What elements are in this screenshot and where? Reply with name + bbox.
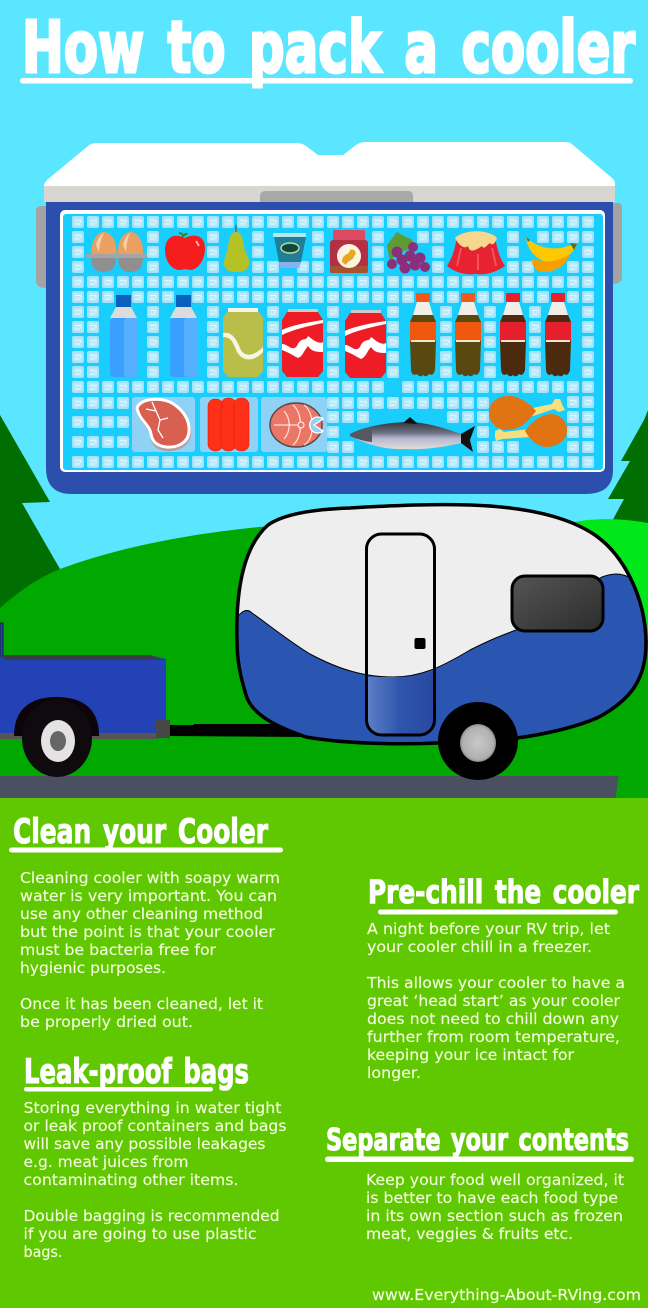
text: leak-proof bags	[24, 1099, 286, 1261]
camper trailer tow bar	[170, 724, 310, 737]
section: leak-proof bags	[24, 1052, 286, 1261]
text: clean your cooler: Cleaning cooler with soapy warm	[20, 869, 280, 887]
icon: orange cola bottle 2	[455, 293, 481, 376]
cooler	[36, 142, 622, 494]
text: leak-proof bags: Storing everything in water tight	[24, 1099, 282, 1117]
icon: red cola bottle 1	[500, 293, 526, 376]
icon: red cola bottle 2	[545, 293, 571, 376]
icon: salmon steak	[270, 403, 323, 447]
trailer outline	[237, 505, 646, 744]
icon: green soda can	[223, 308, 263, 377]
text: clean your cooler: but the point is that your cooler	[20, 923, 276, 941]
text: clean your cooler	[20, 869, 280, 1031]
text: separate your contents: meat, veggies & fruits etc.	[366, 1225, 573, 1243]
cooler body	[46, 200, 613, 494]
text: leak-proof bags: contaminating other items.	[24, 1171, 238, 1189]
icon: eggs in carton	[86, 232, 147, 272]
text: leak-proof bags: bags.	[24, 1243, 62, 1261]
text: separate your contents	[366, 1171, 624, 1243]
text: pre-chill the cooler	[366, 920, 625, 1082]
text: pre-chill the cooler: further from room temperature,	[367, 1028, 620, 1046]
text: leak-proof bags: Double bagging is recommended	[24, 1207, 280, 1225]
text: pre-chill the cooler: keeping your ice intact for	[367, 1046, 575, 1064]
icon: yogurt cup	[273, 233, 306, 268]
dark green hill	[0, 525, 648, 798]
text: leak-proof bags: if you are going to use plastic	[24, 1225, 256, 1243]
cooler lid	[44, 142, 615, 202]
camper trailer	[220, 505, 648, 780]
left pine tree	[0, 415, 60, 620]
cooler interior with ice	[60, 210, 605, 472]
text: pre-chill the cooler: A night before your RV trip, let	[367, 920, 610, 938]
text: leak-proof bags: e.g. meat juices from	[24, 1153, 188, 1171]
text: clean your cooler: use any other cleaning method	[20, 905, 263, 923]
text: clean your cooler: water is very important. You can	[20, 887, 277, 905]
road	[0, 776, 618, 798]
icon: pear	[224, 225, 249, 272]
section: clean your cooler	[9, 812, 283, 1031]
truck wheel	[14, 697, 99, 777]
text: separate your contents: is better to have each food type	[366, 1189, 618, 1207]
text: pre-chill the cooler: longer.	[367, 1064, 421, 1082]
right pine tree	[608, 410, 648, 525]
website credit: www.Everything-About-RVing.com	[372, 1286, 641, 1304]
icon: bananas	[526, 237, 577, 272]
icon: red soda can 1	[282, 309, 323, 377]
cooler side handles	[36, 203, 622, 288]
heading: leak-proof bags: Leak-proof bags	[24, 1052, 249, 1092]
icon: red soda can 2	[345, 310, 386, 378]
text: separate your contents: in its own section such as frozen	[366, 1207, 623, 1225]
text: clean your cooler: must be bacteria free for	[20, 941, 217, 959]
trailer door	[366, 534, 434, 735]
section: separate your contents	[325, 1123, 634, 1243]
trailer wheel	[438, 702, 518, 780]
icon: sausages	[208, 398, 249, 451]
icon: grapes	[387, 232, 430, 274]
heading: clean your cooler: Clean your Cooler	[13, 812, 268, 852]
icon: water bottle 1	[110, 295, 138, 377]
icon: jam jar	[330, 230, 368, 273]
icon: orange cola bottle 1	[410, 293, 436, 376]
food panels	[132, 397, 327, 452]
text: clean your cooler: be properly dried out.	[20, 1013, 193, 1031]
icon: steak	[136, 399, 191, 451]
pickup truck	[0, 623, 170, 777]
text: leak-proof bags: will save any possible leakages	[24, 1135, 266, 1153]
icon: water bottle 2	[170, 295, 198, 377]
bright green hill	[560, 519, 648, 640]
text: pre-chill the cooler: your cooler chill in a freezer.	[367, 938, 592, 956]
sky background	[0, 0, 648, 800]
section: pre-chill the cooler	[366, 873, 639, 1082]
text: clean your cooler: Once it has been cleaned, let it	[20, 995, 263, 1013]
text: separate your contents: Keep your food well organized, it	[366, 1171, 624, 1189]
icon: chicken drumsticks	[489, 396, 567, 447]
panel: green text section	[0, 798, 648, 1308]
trailer shell	[237, 505, 646, 744]
text: pre-chill the cooler: This allows your cooler to have a	[366, 974, 625, 992]
text: leak-proof bags: or leak proof containers and bags	[24, 1117, 286, 1135]
trailer window	[512, 576, 603, 631]
icon: jelly dessert	[447, 231, 505, 274]
icon: apple	[165, 233, 205, 270]
text: pre-chill the cooler: does not need to chill down any	[367, 1010, 619, 1028]
text: pre-chill the cooler: great ‘head start’ as your cooler	[367, 992, 621, 1010]
text: clean your cooler: hygienic purposes.	[20, 959, 166, 977]
trailer blue lower panel	[238, 574, 644, 742]
icon: salmon fish	[350, 417, 475, 452]
